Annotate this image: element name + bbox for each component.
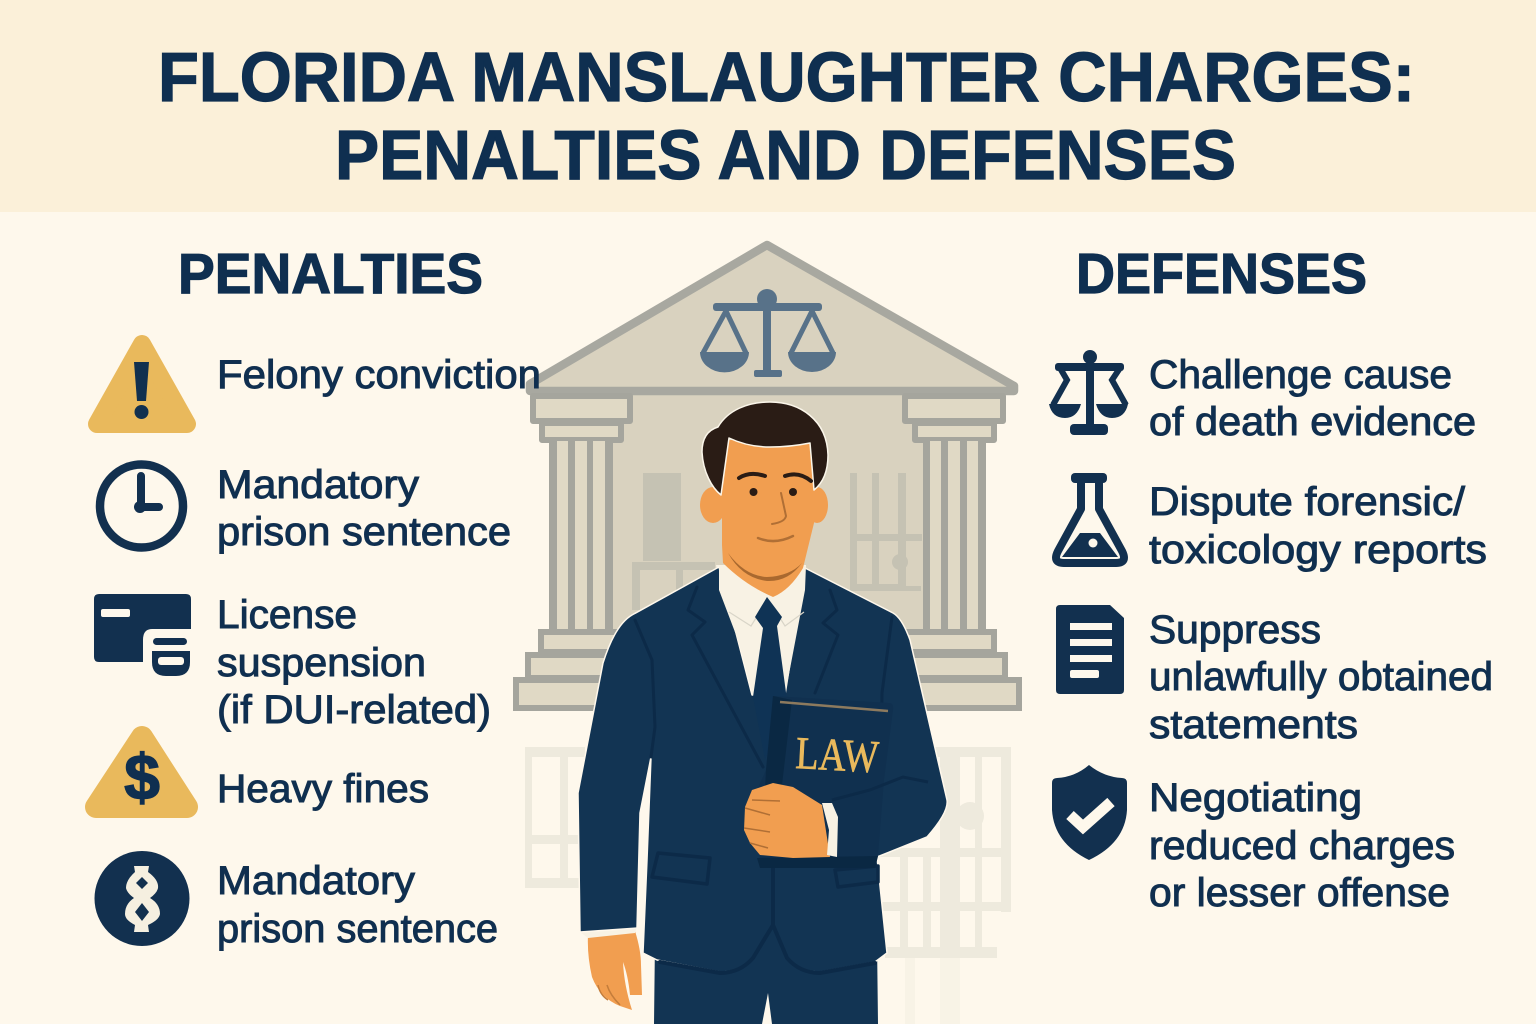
text: heavy fines: Heavy fines bbox=[217, 767, 429, 811]
wall bbox=[549, 394, 986, 634]
law book bbox=[757, 696, 893, 868]
left shirt cuff bbox=[580, 926, 637, 938]
hair bbox=[702, 402, 828, 495]
icon: license card bbox=[94, 594, 191, 676]
icon: scales bbox=[1049, 350, 1128, 435]
text: suppress statements bbox=[1149, 608, 1493, 747]
hand holding book bbox=[744, 777, 928, 858]
icon: dollar triangle bbox=[96, 737, 187, 813]
text: challenge cause: of death evidence bbox=[1149, 400, 1476, 444]
text: mandatory prison sentence: Mandatory bbox=[217, 463, 419, 507]
title bbox=[158, 38, 1415, 194]
icon: clock bbox=[100, 464, 183, 548]
panel: penalties bbox=[94, 242, 541, 951]
lawyer figure bbox=[578, 402, 947, 1024]
ears bbox=[700, 487, 828, 523]
interior window shapes bbox=[632, 473, 922, 610]
neck and face bbox=[722, 440, 814, 597]
text: dispute forensic bbox=[1149, 480, 1487, 572]
heading: defenses: DEFENSES bbox=[1076, 242, 1367, 306]
right shirt cuff bbox=[822, 803, 838, 857]
text: challenge cause bbox=[1149, 353, 1476, 444]
icon: warning triangle bbox=[97, 344, 187, 424]
icon: document bbox=[1056, 605, 1124, 694]
heading: penalties: PENALTIES bbox=[178, 242, 483, 306]
right column bbox=[890, 396, 1019, 708]
facial features bbox=[728, 474, 811, 581]
tie bbox=[753, 597, 787, 760]
text: negotiating reduced charges: or lesser offense bbox=[1149, 871, 1450, 915]
text: negotiating reduced charges: Negotiating bbox=[1149, 776, 1362, 820]
pediment roof bbox=[530, 245, 1014, 391]
trousers bbox=[654, 940, 878, 1024]
text: mandatory prison sentence bbox=[217, 463, 511, 554]
text: mandatory prison sentence repeat bbox=[217, 859, 498, 951]
icon: shield check bbox=[1052, 765, 1127, 860]
text: dispute forensic: Dispute forensic/ bbox=[1149, 480, 1466, 524]
text: challenge cause: Challenge cause bbox=[1149, 353, 1452, 397]
text: mandatory prison sentence repeat: prison sentence bbox=[217, 907, 498, 951]
icon: dollar triangle: $ bbox=[124, 741, 160, 813]
jacket bbox=[578, 567, 947, 972]
law book: LAW bbox=[794, 727, 881, 782]
text: negotiating reduced charges bbox=[1149, 776, 1455, 915]
text: felony conviction: Felony conviction bbox=[217, 353, 541, 397]
text: license suspension: suspension bbox=[217, 641, 426, 685]
title: FLORIDA MANSLAUGHTER CHARGES: bbox=[158, 38, 1415, 116]
shirt collar bbox=[716, 565, 808, 700]
icon: flask bbox=[1056, 473, 1124, 563]
jacket seams and lapels bbox=[635, 587, 892, 973]
left column bbox=[516, 396, 648, 708]
text: suppress statements: unlawfully obtained bbox=[1149, 655, 1493, 699]
text: negotiating reduced charges: reduced charges bbox=[1149, 824, 1455, 868]
text: license suspension bbox=[217, 593, 491, 732]
faded prison bars background bbox=[525, 747, 1011, 1024]
courthouse building bbox=[516, 245, 1019, 708]
text: dispute forensic: toxicology reports bbox=[1149, 528, 1487, 572]
scales emblem bbox=[700, 289, 836, 377]
text: mandatory prison sentence: prison sentence bbox=[217, 510, 511, 554]
text: suppress statements: Suppress bbox=[1149, 608, 1321, 652]
text: suppress statements: statements bbox=[1149, 703, 1358, 747]
title: PENALTIES AND DEFENSES bbox=[335, 116, 1236, 194]
left hand bbox=[588, 931, 642, 1010]
text: mandatory prison sentence repeat: Mandatory bbox=[217, 859, 415, 903]
text: license suspension: (if DUI-related) bbox=[217, 688, 491, 732]
collar overlay bbox=[719, 565, 806, 695]
panel: defenses bbox=[1049, 242, 1493, 915]
left hand finger lines bbox=[598, 985, 620, 1005]
header band bbox=[0, 0, 1536, 212]
icon: twisted ribbon circle bbox=[94, 851, 190, 946]
text: license suspension: License bbox=[217, 593, 357, 637]
